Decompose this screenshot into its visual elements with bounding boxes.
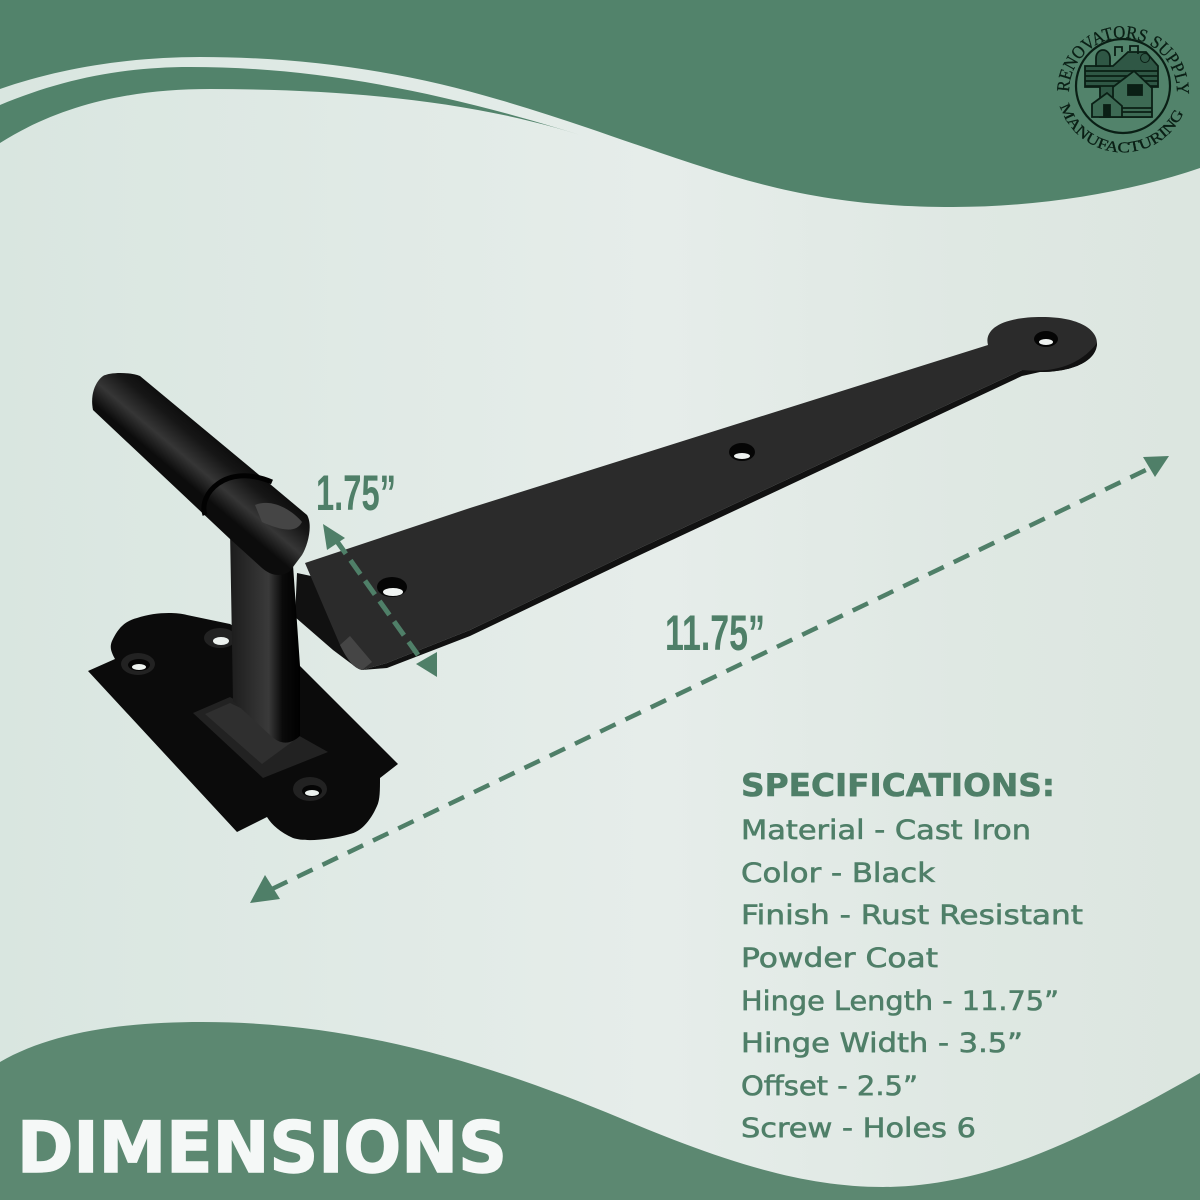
- logo: Renovators Supply Manufacturing: [1056, 26, 1190, 153]
- lower swoosh sliver: [0, 67, 580, 143]
- specifications text block: [741, 768, 1083, 1144]
- spec: powder coat: Powder Coat: [741, 943, 938, 974]
- spec: material: Material - Cast Iron: [741, 815, 1031, 846]
- logo house icon: [1085, 46, 1158, 117]
- base plate: [88, 613, 398, 840]
- label: 11.75 inches: 11.75”: [665, 605, 765, 661]
- long dimension arrow: 11.75 inches: [250, 456, 1169, 903]
- header wave: [0, 0, 1200, 207]
- strap end hole: [1034, 331, 1058, 347]
- barrel: [92, 373, 310, 575]
- strap hole near barrel: [377, 577, 407, 597]
- hinge strap blade: [295, 317, 1097, 670]
- spec: screw holes: Screw - Holes 6: [741, 1113, 976, 1144]
- short dimension arrow: 1.75 inches: [323, 524, 437, 677]
- title: DIMENSIONS: [17, 1107, 507, 1189]
- spec: finish: Finish - Rust Resistant: [741, 900, 1083, 931]
- specifications heading: SPECIFICATIONS:: [741, 768, 1055, 804]
- spec: hinge length: Hinge Length - 11.75”: [741, 986, 1059, 1017]
- logo ring text: RENOVATORS SUPPLY: [1056, 26, 1190, 94]
- footer wave: [0, 1022, 1200, 1200]
- stem: [230, 530, 300, 743]
- spec: hinge width: Hinge Width - 3.5”: [741, 1028, 1023, 1059]
- label: 1.75 inches: 1.75”: [316, 465, 396, 521]
- logo lower text: MANUFACTURING: [1060, 102, 1183, 153]
- hinge illustration: [88, 317, 1097, 840]
- strap middle hole: [729, 443, 755, 461]
- spec: color: Color - Black: [741, 858, 935, 889]
- spec: offset: Offset - 2.5”: [741, 1071, 918, 1102]
